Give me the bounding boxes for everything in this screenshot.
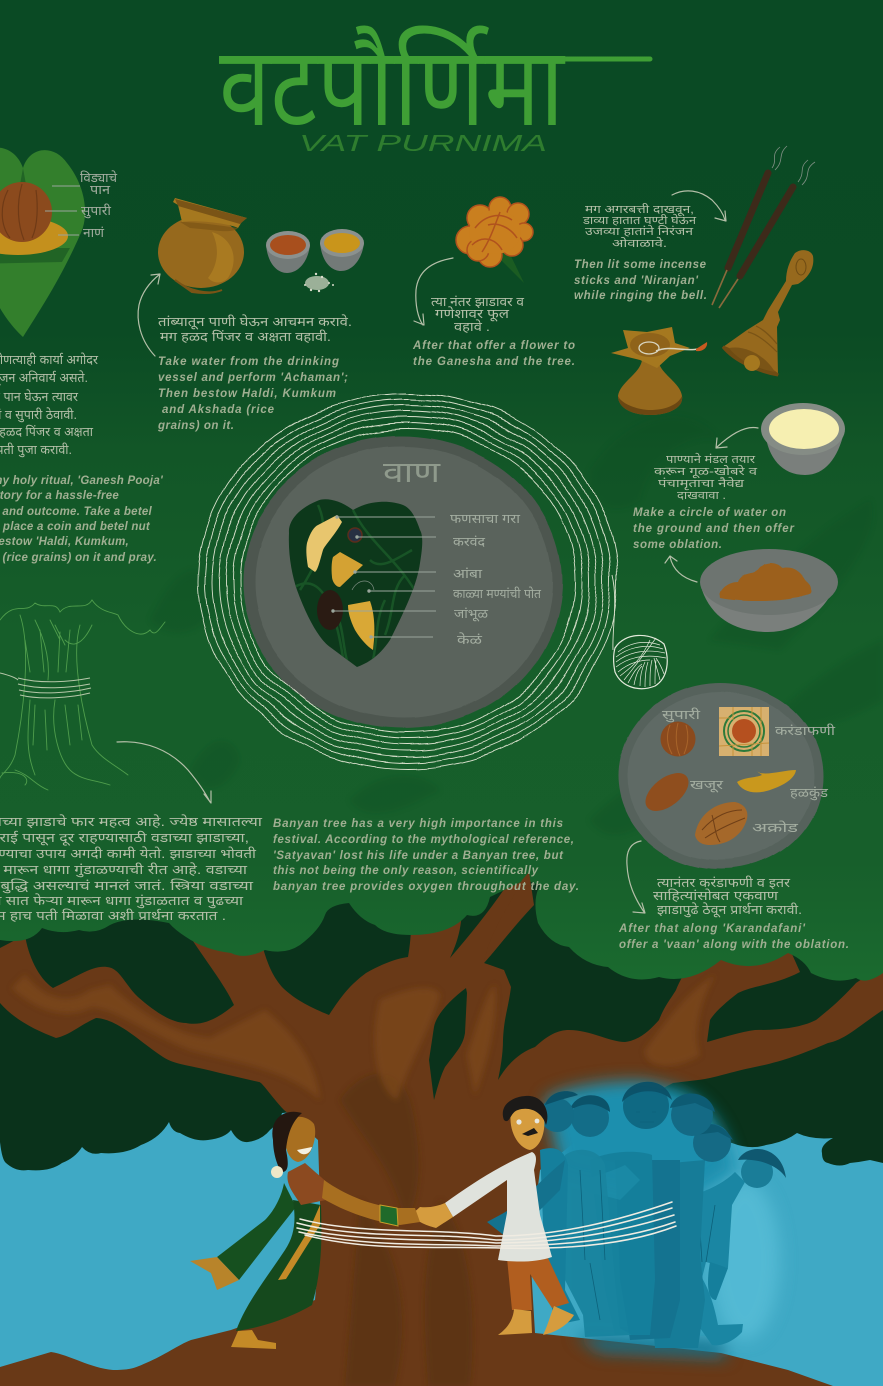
smile <box>297 1147 312 1154</box>
head <box>285 1117 315 1162</box>
English text: the Ganesha and the tree. <box>413 356 575 368</box>
text: banyan English: Banyan tree has a very high importance in this <box>273 818 563 830</box>
icon: panchamrut bowl <box>761 403 845 475</box>
icon: marigold <box>456 197 533 267</box>
ghost 3 <box>580 1082 672 1335</box>
label: banana: केळं <box>457 632 483 647</box>
Marathi text <box>654 453 758 502</box>
sari border <box>278 1205 320 1280</box>
icon: oblation bowl <box>700 549 838 632</box>
English text: some oblation. <box>633 539 722 551</box>
feet <box>498 1306 574 1335</box>
foliage canopy <box>0 0 883 981</box>
callout lines <box>333 517 436 637</box>
English text <box>574 259 707 302</box>
icon: rice grains <box>304 273 334 292</box>
hair <box>503 1096 547 1125</box>
blouse <box>287 1163 330 1205</box>
leaf shading <box>0 168 70 264</box>
panel: karandafani plate <box>619 683 836 869</box>
arrow <box>117 742 211 803</box>
bangles <box>380 1205 398 1226</box>
ghost 6: bent <box>672 1149 786 1345</box>
petal lines <box>472 212 517 252</box>
nut streaks <box>2 184 37 240</box>
banana <box>348 601 374 650</box>
pants <box>507 1258 569 1310</box>
arrow <box>665 556 697 582</box>
English text: the ground and then offer <box>633 523 795 535</box>
sari skirt <box>236 1200 321 1331</box>
panel: water vessel and bowls <box>138 198 364 432</box>
Marathi text: करून गूळ-खोबरे व <box>654 465 758 479</box>
title: Vat Purnima: VAT PURNIMA <box>299 130 547 156</box>
pallu <box>217 1183 296 1280</box>
text: banyan English: festival. According to the mythological reference, <box>273 834 574 846</box>
label: walnut: अक्रोड <box>752 820 800 835</box>
text: karandafani English <box>618 923 849 951</box>
English text <box>412 340 575 368</box>
arrow <box>716 427 758 448</box>
icon: karandafani <box>719 707 769 756</box>
text: banyan English: banyan tree provides oxygen throughout the day. <box>273 881 579 893</box>
label: jackfruit: फणसाचा गरा <box>450 511 521 526</box>
icon: vaan leaf <box>288 499 422 667</box>
tree trunk and branches <box>0 875 883 1386</box>
label: turmeric: हळकुंड <box>790 785 829 801</box>
jackfruit <box>306 515 342 572</box>
moustache <box>522 1128 538 1136</box>
ghost hand <box>487 1160 565 1240</box>
label: karandafani: करंडाफणी <box>775 723 836 738</box>
English text: and Akshada (rice <box>162 404 275 416</box>
icon: betel leaf <box>0 148 85 337</box>
label: paan: पान <box>90 182 111 197</box>
Marathi text: उजव्या हातांने निरंजन <box>585 225 694 238</box>
icon: incense sticks <box>712 146 815 308</box>
label: date: खजूर <box>690 777 724 793</box>
jamun <box>317 590 343 630</box>
plate centre <box>628 692 814 860</box>
text: karandafani Marathi: झाडापुढे ठेवून प्रार्थना करावी. <box>657 902 802 918</box>
panel: flower offering <box>412 197 575 368</box>
text: karandafani Marathi: साहित्यांसोबत एकवाण <box>653 888 779 903</box>
text: banyan English: this not being the only reason, scientifically <box>273 865 539 877</box>
text: banyan Marathi <box>0 814 263 923</box>
icon: coin <box>0 217 68 255</box>
Marathi text: ओवाळावे. <box>612 237 667 250</box>
icon: copper vessel <box>158 198 247 293</box>
ghost 4 <box>615 1093 715 1340</box>
ghost glow <box>545 1081 780 1358</box>
Marathi text: गणेशावर फूल <box>435 306 510 322</box>
foliage brush strokes <box>150 416 883 834</box>
hand and clasp <box>411 1203 453 1228</box>
text: karandafani English: offer a 'vaan' along with the oblation. <box>619 939 849 951</box>
English text: while ringing the bell. <box>574 290 707 302</box>
icon: turmeric <box>737 770 796 792</box>
thread rings around plate <box>198 393 618 769</box>
arrow <box>414 258 453 325</box>
karvand <box>348 528 362 542</box>
icon: supari <box>660 722 696 756</box>
label: karvand: करवंद <box>453 534 486 549</box>
panel: incense lamp and bell <box>574 146 815 415</box>
English text <box>157 356 348 432</box>
text: karandafani English: After that along 'Karandafani' <box>618 923 806 935</box>
panel: betel leaf offering <box>0 148 118 337</box>
English text <box>633 507 795 551</box>
English text: vessel and perform 'Achaman'; <box>158 372 348 384</box>
English text: Make a circle of water on <box>633 507 786 519</box>
text: Ganesh Pooja Marathi <box>0 352 99 459</box>
icon: banyan tree sketch <box>0 600 165 790</box>
icon: walnut <box>695 802 747 845</box>
bead necklace <box>352 581 374 590</box>
icon: haldi bowl <box>320 229 364 271</box>
branch tip over leaves <box>484 872 534 963</box>
title: Marathi: वटपौर्णिमा <box>219 25 566 149</box>
plate rim <box>242 436 562 728</box>
flower <box>271 1166 283 1178</box>
English text: grains) on it. <box>157 420 234 432</box>
English text: Take water from the drinking <box>158 356 339 368</box>
ghost 1 <box>540 1091 580 1325</box>
callouts <box>45 186 80 235</box>
icon: yarn ball and thread <box>612 575 667 689</box>
figures: Yama ghost procession <box>487 1082 786 1348</box>
arrow <box>138 274 160 356</box>
text: karandafani Marathi <box>653 875 802 918</box>
icon: marigold stem <box>496 250 524 283</box>
Marathi text: डाव्या हातात घण्टी घेऊन <box>582 214 697 227</box>
ghost 5 <box>650 1124 733 1348</box>
sky <box>0 1100 883 1386</box>
label: supari: सुपारी <box>81 203 112 219</box>
plate centre <box>254 446 552 718</box>
English text: Then lit some incense <box>574 259 707 271</box>
text: banyan English <box>273 818 579 893</box>
label: mango: आंबा <box>453 566 483 581</box>
Marathi text: मग अगरबत्ती दाखवून, <box>585 203 694 217</box>
icon: date <box>639 766 695 818</box>
arm <box>322 1180 420 1225</box>
text: banyan English: 'Satyavan' lost his life under a Banyan tree, but <box>273 850 564 862</box>
text: Ganesh Pooja English <box>0 475 164 564</box>
figure: Satyavan <box>411 1096 574 1335</box>
label: coin: नाणं <box>83 225 105 240</box>
Marathi text: त्या नंतर झाडावर व <box>431 295 525 309</box>
Marathi text: तांब्यातून पाणी घेऊन आचमन करावे. <box>158 314 352 330</box>
label: jamun: जांभूळ <box>454 606 489 622</box>
text: karandafani Marathi: त्यानंतर करंडाफणी व इतर <box>657 875 791 890</box>
plate rim <box>619 683 823 869</box>
Marathi text: पंचामृताचा नैवेद्य <box>658 477 745 490</box>
pallu border <box>190 1257 239 1290</box>
Marathi text: दाखवावा . <box>677 490 726 502</box>
kurta <box>445 1152 552 1262</box>
Marathi text <box>431 295 525 334</box>
arrow <box>672 191 726 221</box>
eyes <box>516 1119 522 1125</box>
English text: Then bestow Haldi, Kumkum <box>158 388 336 400</box>
Marathi text: वहावे . <box>454 319 490 334</box>
label: black beads: काळ्या मण्यांची पोत <box>453 586 542 601</box>
icon: betel nut <box>0 182 52 242</box>
label: betel leaf: विड्याचे <box>80 170 118 185</box>
arrow <box>627 841 645 913</box>
Marathi text <box>158 314 352 344</box>
thread around tree <box>297 1202 676 1248</box>
Marathi text <box>582 203 697 250</box>
panel: water circle and oblation <box>633 403 845 632</box>
icon: kumkum bowl <box>266 231 310 273</box>
Marathi text: पाण्याने मंडल तयार <box>666 453 755 466</box>
callout dots <box>331 515 373 639</box>
ghost 2 <box>565 1095 632 1337</box>
label: supari: सुपारी <box>662 707 701 723</box>
icon: oil lamp <box>611 327 707 415</box>
foot <box>231 1330 276 1349</box>
English text: After that offer a flower to <box>412 340 575 352</box>
figure: Savitri <box>190 1112 420 1349</box>
English text: sticks and 'Niranjan' <box>574 275 699 287</box>
panel: vaan plate <box>242 436 562 728</box>
icon: bell <box>723 250 813 375</box>
plate heading: वाण <box>383 457 441 489</box>
head <box>510 1106 544 1150</box>
hair <box>272 1112 302 1172</box>
Marathi text: मग हळद पिंजर व अक्षता वहावी. <box>160 329 331 344</box>
mango <box>332 552 363 587</box>
